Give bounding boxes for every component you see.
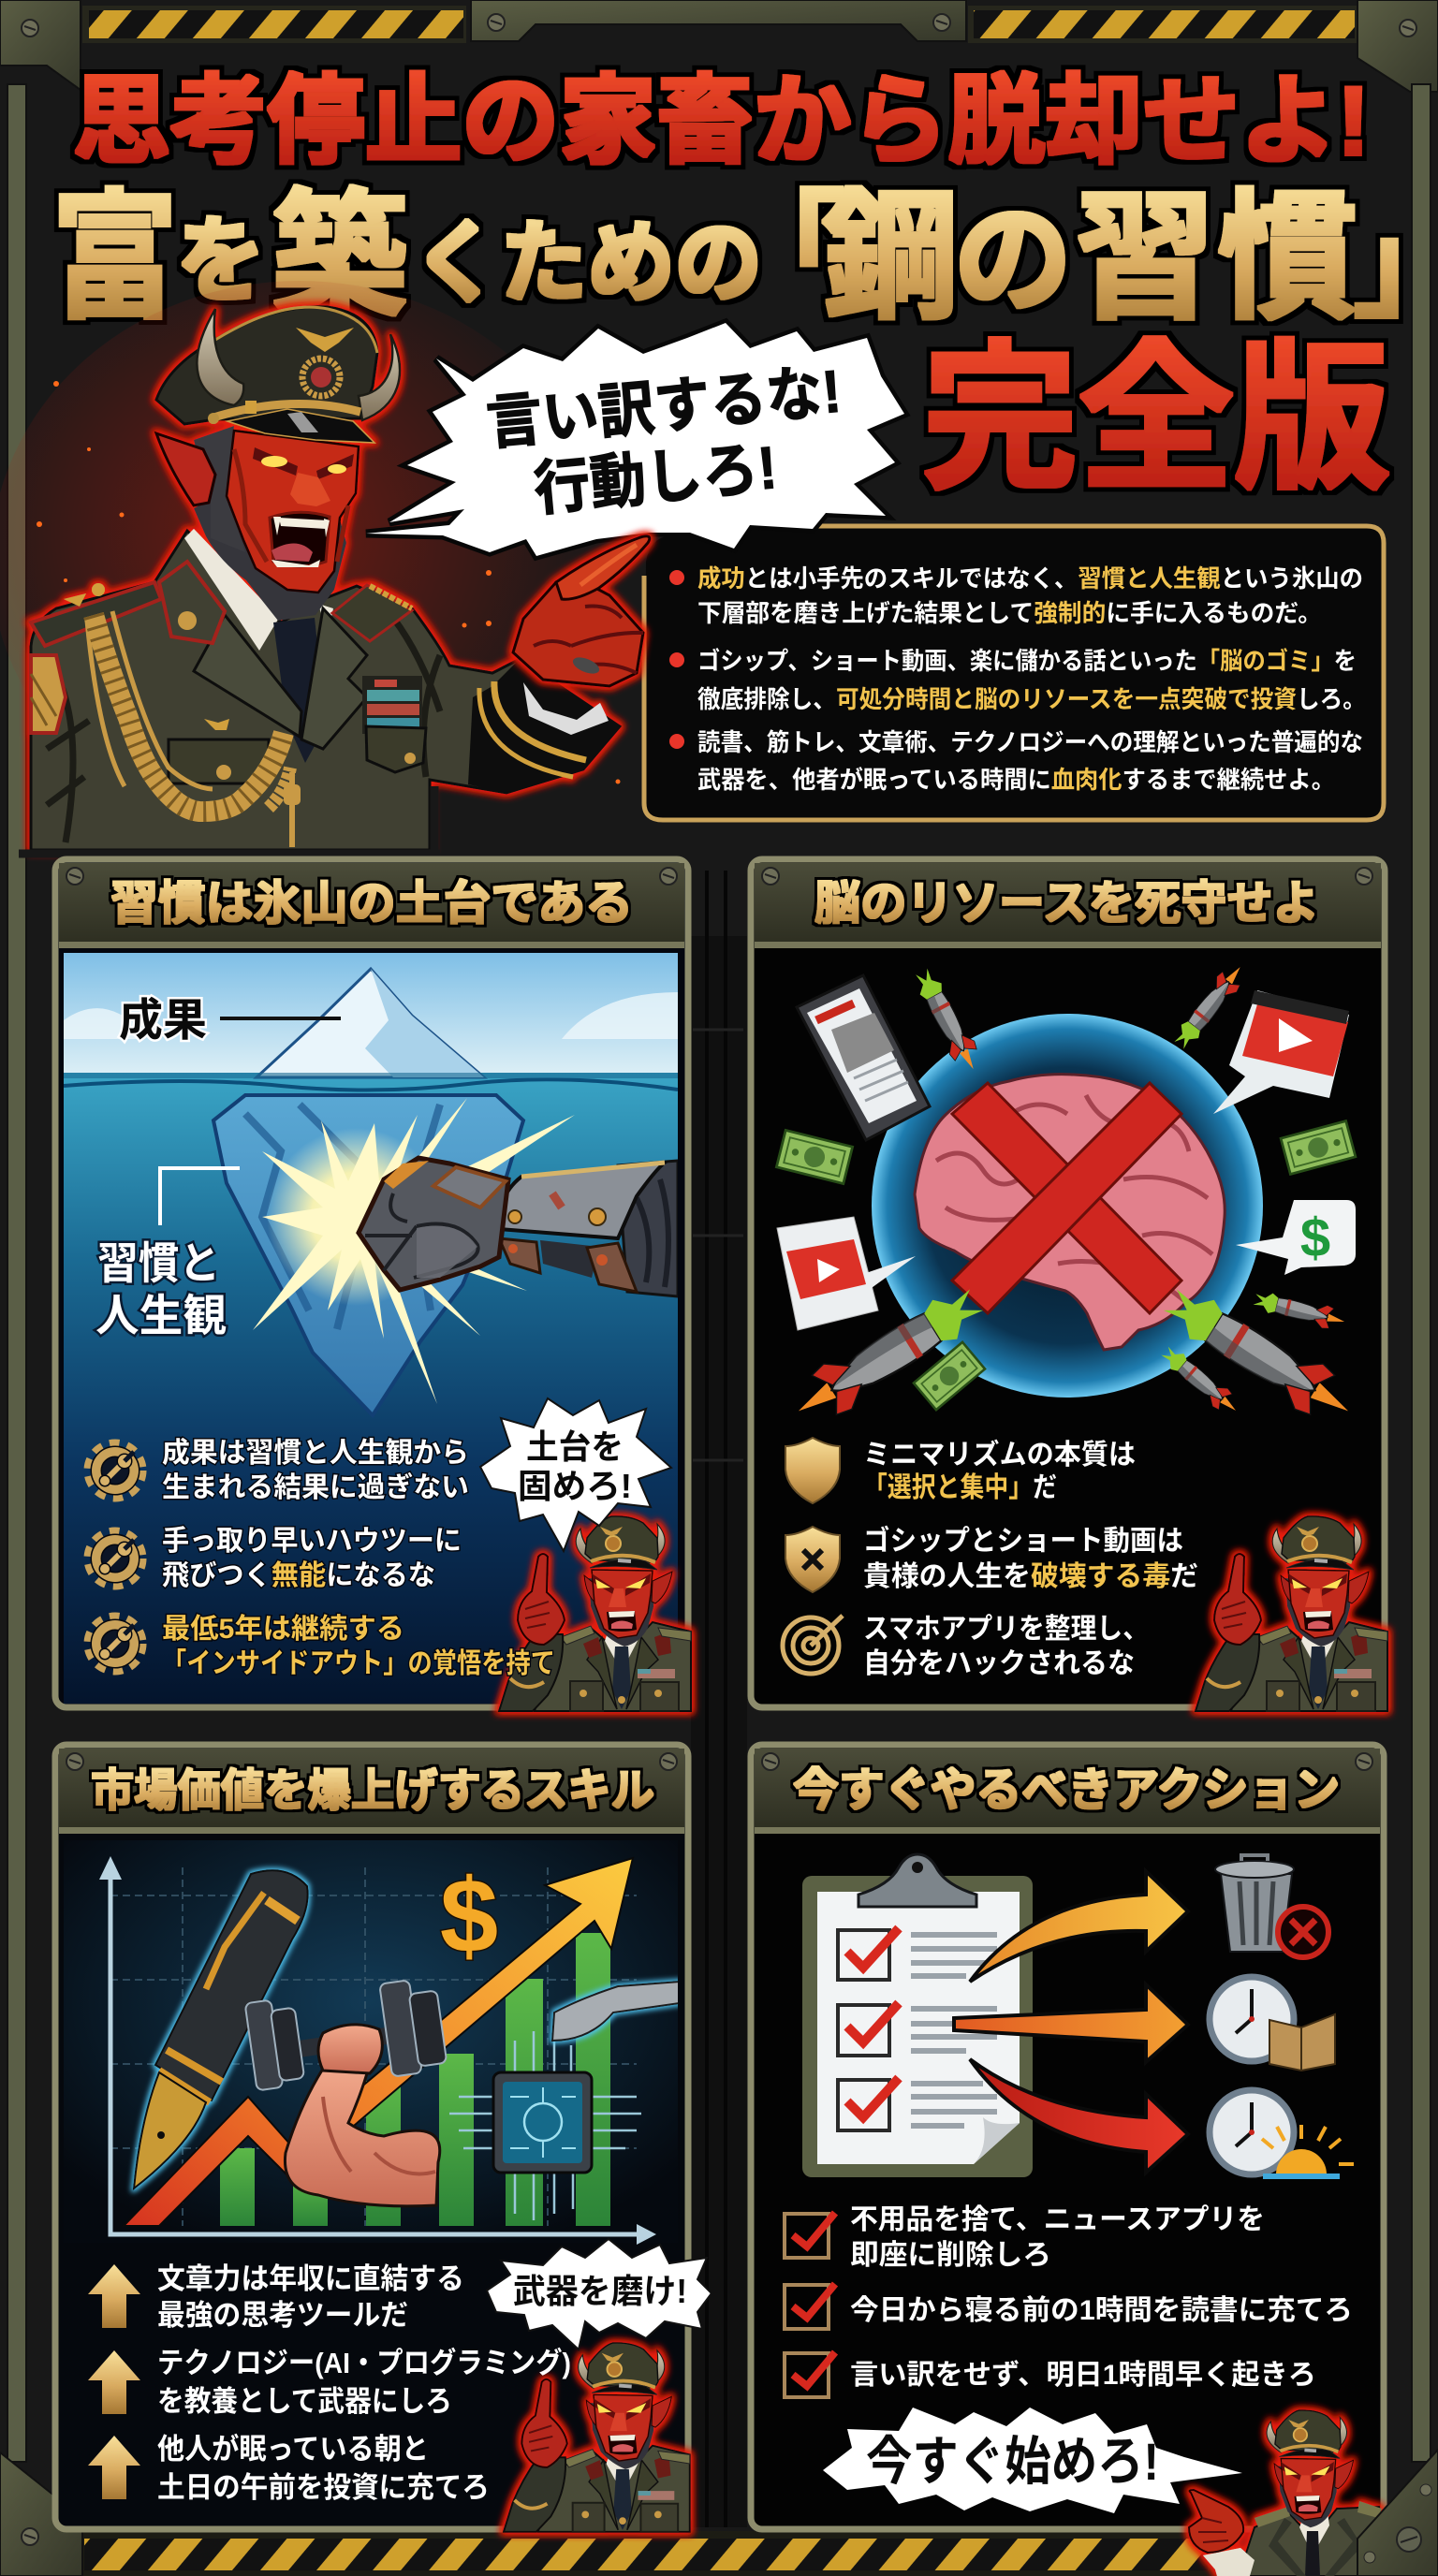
info box: key points: 武器を、他者が眠っている時間に血肉化するまで継続せよ。 [697,766,1335,794]
bullets: 貴様の人生を破壊する毒だ [863,1561,1198,1592]
heading: 市場価値を爆上げするスキル [91,1766,654,1816]
devil pointing left [1189,2410,1395,2576]
speech bubble: 土台を固めろ: 土台を [526,1427,624,1466]
bullets [88,2262,571,2504]
growth arrow [124,1858,633,2226]
title: line 2: 「 [724,181,845,317]
icon: trash can [1215,1855,1328,1957]
label lines [160,1168,240,1225]
panel 3 frame and header [55,1745,688,2529]
label: 成果: 成果 [119,996,207,1046]
chart [64,1840,680,2245]
bullets: 最強の思考ツールだ [157,2299,408,2332]
speech bubble: 今すぐ始めろ: 今すぐ始めろ! [866,2432,1159,2491]
label: 習慣と人生観: 人生観 [95,1291,227,1340]
distraction icons [776,959,1362,1434]
bullets: 他人が眠っている朝と [157,2433,429,2466]
title: line 2: 富 [51,179,178,336]
speech bubble: 土台を固めろ [480,1398,671,1551]
bullets: 飛びつく無能になるな [162,1560,435,1591]
speech bubble: 土台を固めろ: 固めろ! [518,1467,632,1505]
icon: video clapper bubble [1213,990,1349,1114]
heading: 脳のリソースを死守せよ [814,877,1319,929]
heading: 習慣は氷山の土台である [110,877,633,929]
icon: money [776,1130,853,1184]
circuit chip [449,2031,641,2220]
heading: 今すぐやるべきアクション [793,1765,1340,1816]
bullets [89,1438,555,1679]
dumbbell and arm [245,1980,447,2206]
info box: key points: ゴシップ、ショート動画、楽に儲かる話といった「脳のゴミ」を [697,647,1357,675]
icon: clock and book [1210,1977,1335,2071]
red X [952,1083,1181,1313]
icon: dollar bubble: $ [1300,1208,1330,1268]
fist and arm [359,1158,678,1296]
panel: 脳のリソースを死守せよ [751,859,1387,1711]
bullets: スマホアプリを整理し、 [863,1614,1149,1645]
info box: key points: 下層部を磨き上げた結果として強制的に手に入るものだ。 [697,599,1322,627]
panel: 市場価値を爆上げするスキル [55,1745,712,2532]
pen [134,1870,308,2188]
bullets: 自分をハックされるな [863,1648,1135,1679]
mini devil [499,1516,691,1711]
bullets: ミニマリズムの本質は [863,1439,1136,1471]
title: line 2: 慣 [1217,179,1357,336]
title: line 2: 築 [271,179,408,336]
bullets: 生まれる結果に過ぎない [162,1472,469,1503]
title: line 2: を [177,209,265,314]
icon: dollar bubble [1236,1200,1356,1275]
bullets: 今日から寝る前の1時間を読書に充てろ [850,2295,1353,2326]
clipboard [802,1854,1033,2177]
bullets: 土日の午前を投資に充てろ [157,2471,490,2504]
icon: shield with x [785,1527,840,1592]
icon: video window bubble [777,1217,916,1330]
title: line 2: くための [413,213,762,314]
icon: shield [785,1438,840,1503]
bullets: ゴシップとショート動画は [863,1525,1183,1557]
bullets: 「選択と集中」だ [863,1472,1057,1503]
dollar sign: $ [440,1857,498,1974]
arrows to actions [954,1871,1188,2173]
speech bubble: 武器を磨け [487,2239,712,2349]
label: 習慣と人生観: 習慣と [97,1238,220,1288]
mini devil [504,2343,690,2532]
speech bubble: 言い訳するな [366,323,904,556]
panel 1 frame and header [55,859,688,1707]
top frame with hazard stripes [0,0,1438,92]
bullets [783,1438,1198,1679]
bullets: 最低5年は継続する [162,1614,404,1645]
commander devil: body and head [0,281,620,854]
bullets: 不用品を捨て、ニュースアプリを [850,2204,1265,2235]
info box: key points: 徹底排除し、可処分時間と脳のリソースを一点突破で投資しろ。 [697,685,1366,713]
head [156,307,377,424]
icon: missiles [785,1277,990,1434]
bottom frame with hazard stripes [0,2452,1367,2576]
speech bubble: 言い訳するな: 行動しろ! [531,433,780,523]
axes [110,1872,646,2234]
panel 4 frame and header [751,1745,1384,2529]
robot hand [552,1982,680,2041]
panel: 習慣は氷山の土台である [55,859,691,1711]
commander devil: pointing hand [513,536,650,686]
bullets: 「インサイドアウト」の覚悟を持て [162,1648,555,1679]
speech bubble: 言い訳するな: 言い訳するな! [483,358,844,457]
title: line 2: の [954,194,1072,328]
icon: clock and sunrise [1210,2090,1354,2179]
title: line 2 [51,179,1438,336]
mini devil [1196,1516,1387,1711]
iceberg illustration [64,953,678,1704]
bullets: 即座に削除しろ [850,2240,1051,2271]
shield sphere [872,1014,1263,1398]
panel 2 frame and header [751,859,1385,1707]
speech bubble: 武器を磨け: 武器を磨け! [513,2272,687,2310]
bullets: 文章力は年収に直結する [157,2262,464,2295]
bullets: 言い訳をせず、明日1時間早く起きろ [850,2360,1316,2391]
bullets: テクノロジー(AI・プログラミング) [157,2347,571,2379]
speech bubble: 今すぐ始めろ [823,2408,1242,2513]
bullets: 成果は習慣と人生観から [162,1438,469,1469]
title: 完全版: 完全版 [922,329,1390,509]
label: 習慣と人生観 [95,1238,227,1340]
bullets: を教養として武器にしろ [157,2385,452,2418]
info box: key points: 成功とは小手先のスキルではなく、習慣と人生観という氷山の [697,564,1363,593]
brain [915,1075,1225,1350]
title: line 1: 思考停止の家畜から脱却せよ! [73,67,1370,176]
icon: target [783,1616,843,1674]
icon: phone [797,975,930,1140]
corner plate [1357,2450,1438,2576]
title: line 2: 習 [1075,179,1215,336]
title: line 2: 鋼 [822,179,959,336]
info box: key points: 読書、筋トレ、文章術、テクノロジーへの理解といった普遍的な [697,728,1363,756]
info box: key points [644,526,1384,820]
panel: 今すぐやるべきアクション [751,1745,1438,2576]
bullets: 手っ取り早いハウツーに [162,1526,462,1557]
bullets [785,2204,1353,2397]
